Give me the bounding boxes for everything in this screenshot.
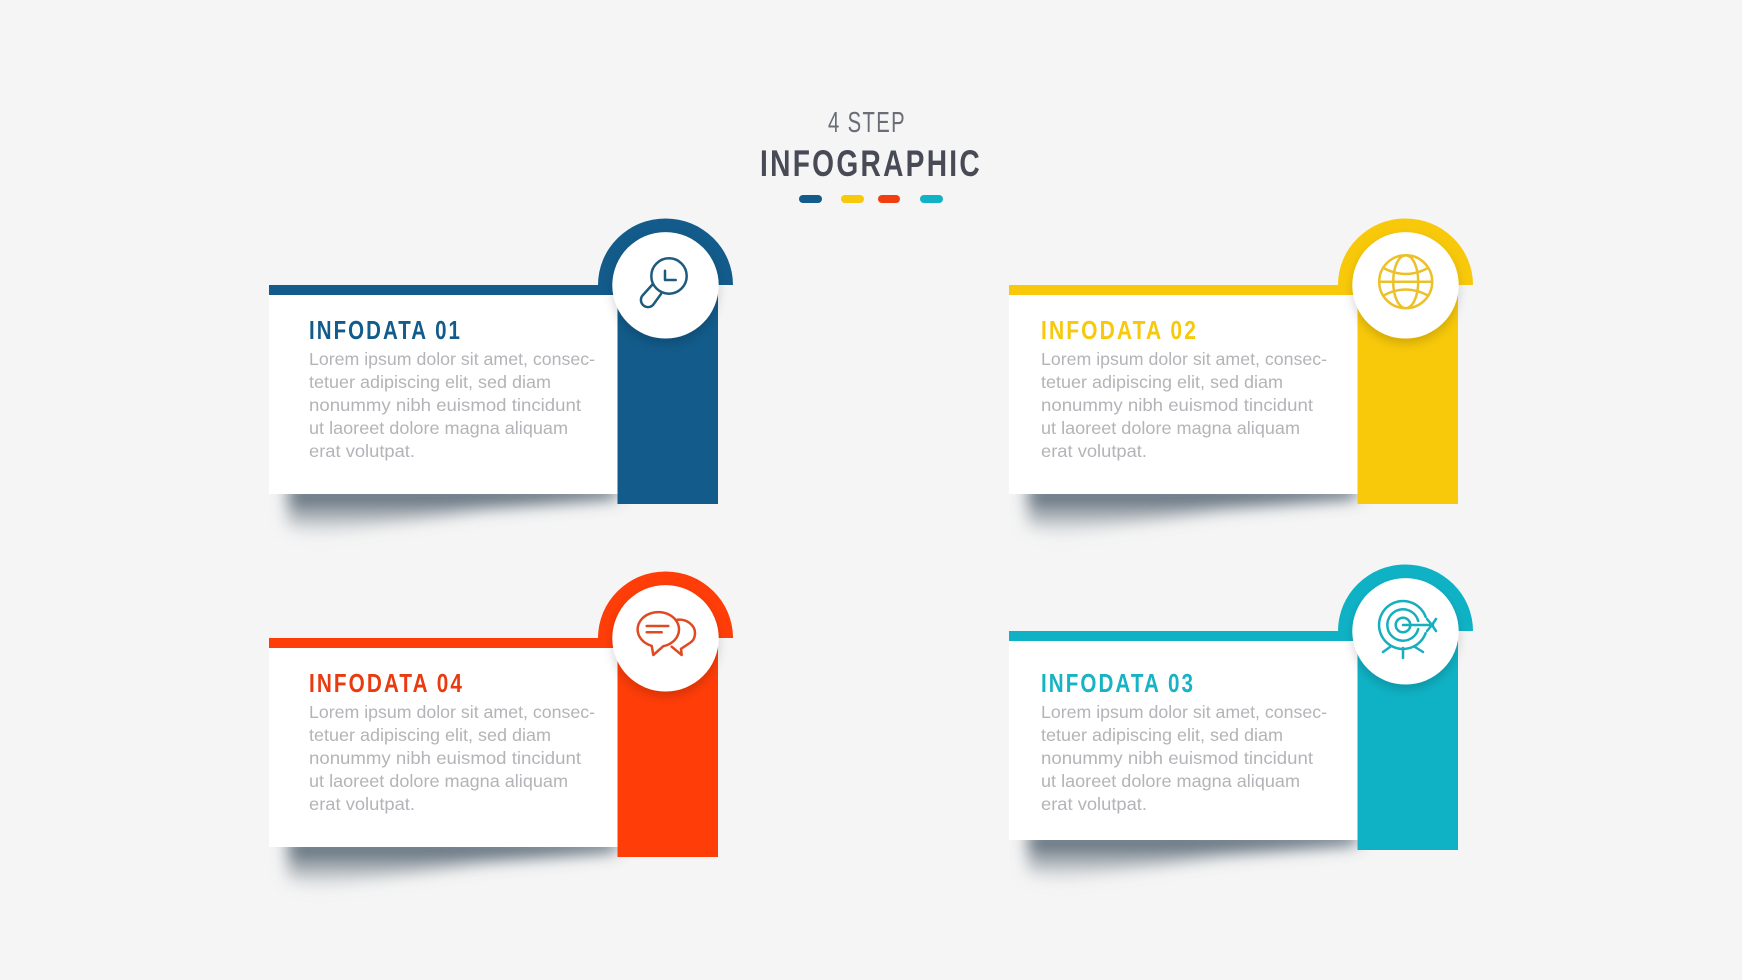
- body text: nonummy nibh euismod tincidunt: [1041, 395, 1313, 415]
- heading: INFODATA 02: [1041, 315, 1198, 345]
- body text: [309, 702, 595, 814]
- heading: INFODATA 04: [309, 668, 464, 698]
- body text: nonummy nibh euismod tincidunt: [309, 395, 581, 415]
- body text: [1041, 702, 1327, 814]
- body text: ut laoreet dolore magna aliquam: [309, 418, 568, 438]
- heading: INFODATA 03: [1041, 668, 1195, 698]
- body text: nonummy nibh euismod tincidunt: [1041, 748, 1313, 768]
- body text: Lorem ipsum dolor sit amet, consec-: [309, 702, 595, 722]
- body text: ut laoreet dolore magna aliquam: [1041, 771, 1300, 791]
- body text: Lorem ipsum dolor sit amet, consec-: [1041, 702, 1327, 722]
- heading: INFODATA 01: [309, 315, 462, 345]
- body text: erat volutpat.: [1041, 441, 1147, 461]
- body text: erat volutpat.: [1041, 794, 1147, 814]
- title: INFOGRAPHIC: [760, 143, 982, 184]
- body text: erat volutpat.: [309, 794, 415, 814]
- body text: [309, 349, 595, 461]
- panel: infodata 01: [269, 219, 735, 534]
- body text: Lorem ipsum dolor sit amet, consec-: [309, 349, 595, 369]
- body text: tetuer adipiscing elit, sed diam: [309, 372, 551, 392]
- body text: ut laoreet dolore magna aliquam: [309, 771, 568, 791]
- panel: infodata 03: [1009, 564, 1475, 880]
- body text: erat volutpat.: [309, 441, 415, 461]
- body text: tetuer adipiscing elit, sed diam: [1041, 725, 1283, 745]
- body text: tetuer adipiscing elit, sed diam: [309, 725, 551, 745]
- icon: magnifier with clock: [641, 258, 687, 307]
- body text: nonummy nibh euismod tincidunt: [309, 748, 581, 768]
- panel: infodata 02: [1009, 219, 1475, 534]
- title: 4 STEP: [828, 107, 906, 139]
- icon: chat bubbles: [638, 612, 695, 655]
- panel: infodata 04: [269, 572, 735, 887]
- colour dashes: [799, 195, 943, 203]
- body text: tetuer adipiscing elit, sed diam: [1041, 372, 1283, 392]
- icon: globe: [1379, 255, 1432, 308]
- body text: ut laoreet dolore magna aliquam: [1041, 418, 1300, 438]
- icon: target: [1379, 601, 1436, 658]
- body text: [1041, 349, 1327, 461]
- body text: Lorem ipsum dolor sit amet, consec-: [1041, 349, 1327, 369]
- title: [760, 107, 982, 184]
